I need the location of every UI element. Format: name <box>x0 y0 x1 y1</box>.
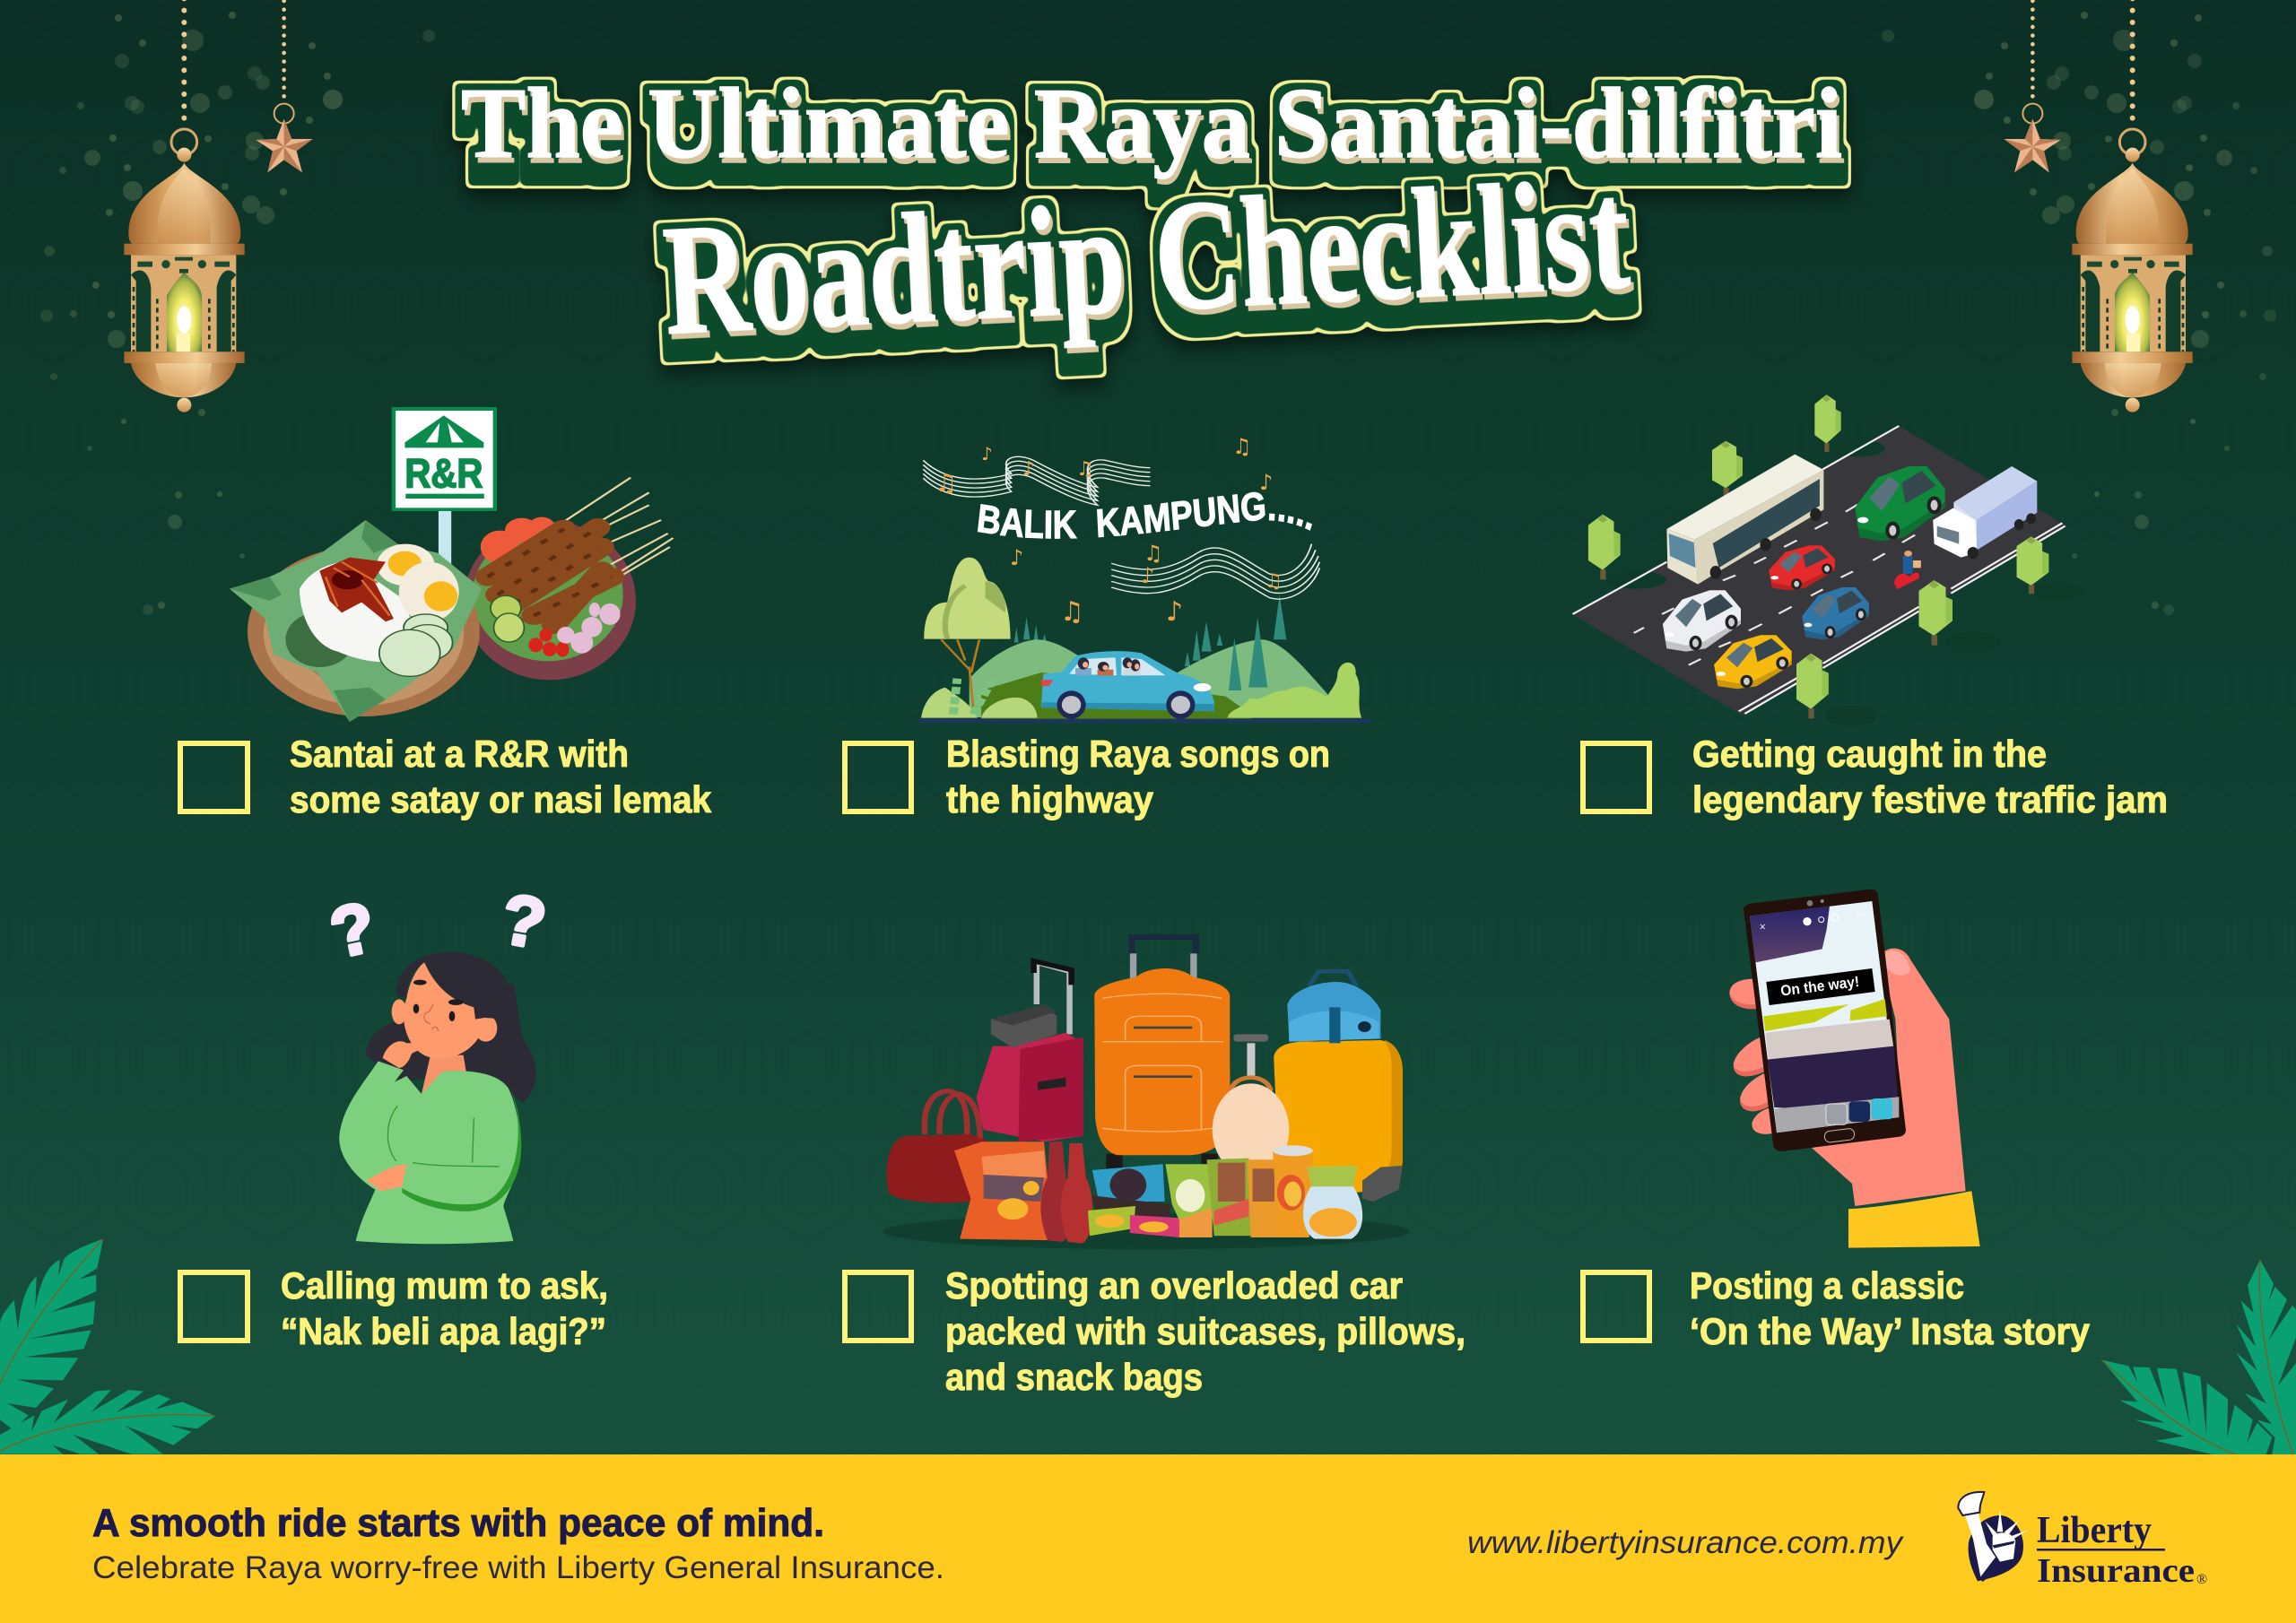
label: some satay or nasi lemak <box>290 778 712 820</box>
palm leaves right <box>2101 1260 2296 1454</box>
illustration: R&R sign with nasi lemak and satay <box>230 407 673 722</box>
panel: R&R food <box>180 407 712 820</box>
label: Blasting Raya songs on <box>946 733 1330 775</box>
illustration: thinking woman: ? <box>496 879 552 964</box>
logo wordmark: ® <box>2196 1572 2207 1587</box>
label: the highway <box>946 778 1154 820</box>
label: packed with suitcases, pillows, <box>945 1310 1465 1352</box>
music notes: ♫ <box>1076 458 1094 481</box>
label: Santai at a R&R with <box>290 733 629 775</box>
palm leaves left <box>0 1239 215 1454</box>
label <box>281 1264 608 1352</box>
label: “Nak beli apa lagi?” <box>281 1310 606 1352</box>
title <box>461 68 1842 369</box>
music notes: ♫ <box>1060 596 1084 628</box>
illustration: hand holding phone <box>1729 890 1980 1248</box>
lantern and star right <box>2004 0 2193 412</box>
music notes: ♪ <box>1141 563 1154 588</box>
label <box>1690 1264 2091 1352</box>
curved text: BALIK KAMPUNG..... <box>975 483 1323 547</box>
panel: overloaded car <box>845 937 1465 1398</box>
checkbox <box>845 1272 911 1341</box>
illustration: R&R sign with nasi lemak and satay: R&R <box>404 452 483 496</box>
label: Calling mum to ask, <box>281 1264 608 1306</box>
lantern and star left <box>124 0 313 412</box>
music notes: ♫ <box>1232 434 1252 459</box>
label <box>945 1264 1465 1398</box>
logo wordmark: Insurance <box>2037 1552 2195 1590</box>
title line 2: Roadtrip Checklist <box>659 147 1633 369</box>
music notes: ♪ <box>1010 545 1023 570</box>
music notes: ♫ <box>1265 570 1283 593</box>
icon: statue of liberty <box>1958 1492 2029 1581</box>
footer headline: A smooth ride starts with peace of mind. <box>92 1501 824 1545</box>
illustration: luggage and snacks <box>883 937 1410 1249</box>
illustration: isometric highway traffic <box>1572 395 2085 726</box>
label: legendary festive traffic jam <box>1692 778 2168 820</box>
label <box>1692 733 2168 820</box>
illustration: hand holding phone: Aa <box>1857 911 1866 919</box>
music notes: ♪ <box>1166 596 1183 628</box>
label: Spotting an overloaded car <box>945 1264 1403 1306</box>
label <box>290 733 712 820</box>
panel: calling mum <box>180 879 608 1352</box>
illustration: thinking woman <box>324 879 552 1244</box>
label <box>946 733 1330 820</box>
music notes: ♪ <box>1259 470 1273 495</box>
illustration: car with music and hills <box>918 456 1370 723</box>
checkbox <box>1583 743 1649 812</box>
label: Posting a classic <box>1690 1264 1964 1306</box>
bokeh sparkles right <box>1882 12 2276 615</box>
label: ‘On the Way’ Insta story <box>1690 1310 2091 1352</box>
music notes <box>935 434 1283 628</box>
panel: insta story <box>1583 890 2091 1352</box>
title line 1: The Ultimate Raya Santai-dilfitri <box>461 68 1842 179</box>
music notes: ♪ <box>1022 458 1035 481</box>
logo wordmark: Liberty <box>2037 1510 2152 1551</box>
label: and snack bags <box>945 1356 1203 1398</box>
Liberty Insurance logo <box>1958 1492 2207 1590</box>
footer band <box>0 1454 2296 1623</box>
footer subline: Celebrate Raya worry-free with Liberty General Insurance. <box>92 1550 944 1585</box>
logo wordmark <box>2037 1510 2207 1590</box>
music notes: ♪ <box>981 443 993 464</box>
bokeh sparkles left <box>40 12 435 615</box>
checkbox <box>845 743 911 812</box>
panel: Raya songs <box>845 434 1370 820</box>
checkbox <box>1583 1272 1649 1341</box>
illustration: hand holding phone: × <box>1759 923 1766 933</box>
checkbox <box>180 743 248 812</box>
panel: traffic jam <box>1572 395 2168 820</box>
illustration: thinking woman: ? <box>324 887 382 973</box>
phone story caption: On the way! <box>1779 973 1860 1000</box>
checkbox <box>180 1272 248 1341</box>
music notes: ♫ <box>1144 541 1163 566</box>
website url: www.libertyinsurance.com.my <box>1467 1525 1905 1560</box>
music notes: ♫ <box>935 468 957 498</box>
label: Getting caught in the <box>1692 733 2047 775</box>
